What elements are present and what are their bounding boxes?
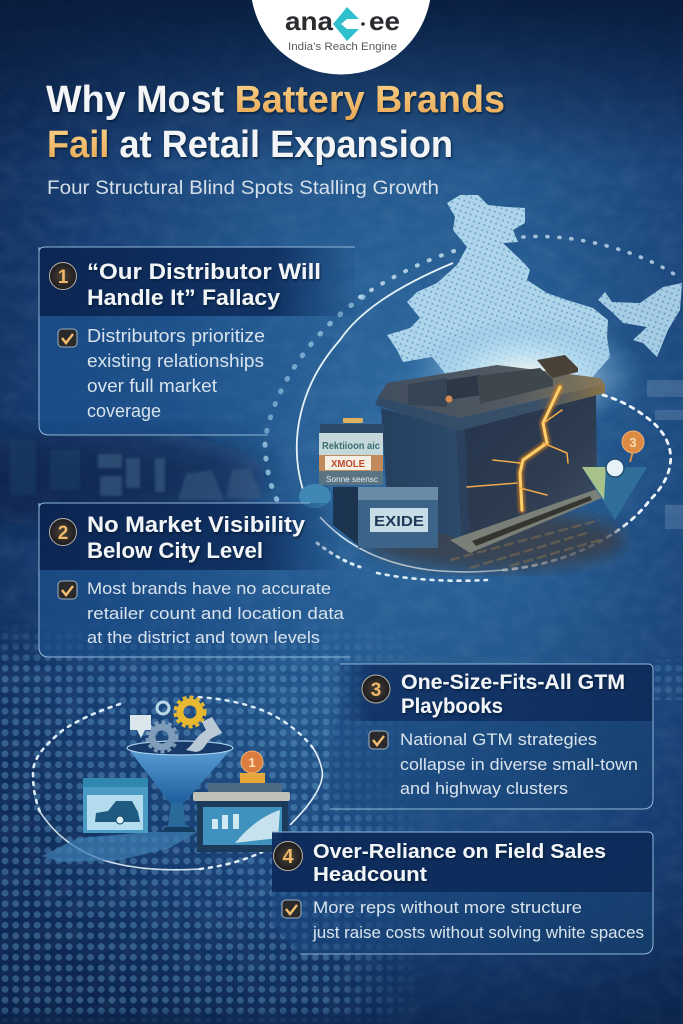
right side faded signage bbox=[647, 380, 683, 529]
panel 3 title bbox=[401, 671, 625, 718]
panel 1 text: over full market bbox=[87, 376, 217, 396]
panel 1 title bbox=[87, 259, 321, 310]
title bbox=[46, 79, 505, 166]
panel 3 number: 3 bbox=[371, 680, 381, 701]
panel 3 check bbox=[369, 731, 388, 749]
panel 4 title: Headcount bbox=[313, 863, 427, 886]
panel 2 title bbox=[87, 512, 306, 563]
panel 1 text bbox=[87, 326, 265, 421]
pin 1 bbox=[241, 751, 263, 773]
title: Fail at Retail Expansion bbox=[47, 124, 453, 166]
battery left face bbox=[381, 408, 462, 540]
battery front face bbox=[456, 390, 597, 545]
panel 4 number: 4 bbox=[282, 846, 294, 868]
panel 1 text: Distributors prioritize bbox=[87, 326, 265, 346]
battery base plate bbox=[450, 488, 604, 553]
panel 2 text: retailer count and location data bbox=[87, 604, 345, 623]
battery with badge bbox=[193, 751, 290, 852]
panel 4 check bbox=[282, 900, 301, 918]
panel 3 body bbox=[330, 721, 653, 809]
logo wordmark left: ana bbox=[285, 6, 334, 36]
battery with badge: 1 bbox=[248, 755, 256, 770]
panel 4 title bbox=[313, 840, 606, 886]
panel 3 title: Playbooks bbox=[401, 695, 503, 718]
panel 3 number bbox=[362, 675, 390, 703]
panel 1 body bbox=[39, 316, 350, 435]
small funnel with pin 3 bbox=[582, 431, 647, 520]
panel 1 number bbox=[50, 262, 76, 290]
small batteries stack bbox=[299, 418, 438, 548]
browser car card bbox=[83, 778, 148, 833]
panel 2 text: at the district and town levels bbox=[87, 628, 320, 647]
logo wordmark right: ee bbox=[369, 6, 400, 36]
panel 1 text: existing relationships bbox=[87, 351, 264, 371]
panel 3 text: and highway clusters bbox=[400, 779, 568, 798]
panel 2 bbox=[39, 503, 350, 657]
panel 4 text bbox=[312, 899, 644, 942]
panel 1 bbox=[39, 247, 355, 435]
subtitle: Four Structural Blind Spots Stalling Growth bbox=[47, 178, 439, 199]
battery lid rim bbox=[375, 384, 605, 431]
logo badge bbox=[250, 0, 432, 74]
panel 4 text: just raise costs without solving white spaces bbox=[312, 924, 644, 942]
dotted orbit ring: battery scene bbox=[265, 236, 680, 581]
logo dot bbox=[361, 22, 365, 26]
bottom orbit ring bbox=[33, 697, 322, 870]
panel 4 bbox=[272, 832, 653, 954]
battery lid top bbox=[378, 365, 605, 418]
icon: gears and tools bbox=[130, 697, 222, 752]
panel 3 text bbox=[400, 730, 638, 798]
panel 2 body bbox=[39, 570, 350, 657]
car bbox=[95, 801, 140, 822]
map shadow bbox=[42, 832, 197, 862]
panel 1 title: “Our Distributor Will bbox=[87, 259, 321, 284]
panel 3 text: National GTM strategies bbox=[400, 730, 597, 749]
title: Why Most Battery Brands bbox=[46, 79, 505, 121]
panel 2 text: Most brands have no accurate bbox=[87, 579, 331, 598]
panel 3 text: collapse in diverse small-town bbox=[400, 755, 638, 774]
back battery with labels: XMOLE bbox=[331, 459, 365, 470]
panel 1 number: 1 bbox=[58, 267, 69, 288]
funnel bbox=[127, 741, 233, 832]
panel 1 header bbox=[39, 247, 355, 316]
main cracked battery bbox=[375, 355, 605, 553]
panel 2 title: Below City Level bbox=[87, 538, 263, 563]
panel 3 bbox=[330, 664, 653, 809]
panel 1 check bbox=[58, 329, 77, 347]
small funnel with pin 3: 3 bbox=[629, 435, 637, 450]
panel 1 title: Handle It” Fallacy bbox=[87, 285, 280, 310]
panel 3 title: One-Size-Fits-All GTM bbox=[401, 671, 625, 694]
panel 4 body bbox=[272, 892, 653, 954]
panel 4 text: More reps without more structure bbox=[313, 899, 582, 917]
panel 4 header bbox=[272, 832, 653, 892]
back battery with labels: Sonne seensc bbox=[326, 475, 378, 484]
left blurred street scene bbox=[10, 440, 262, 500]
pavement under battery bbox=[365, 510, 625, 570]
blue token bbox=[299, 484, 331, 508]
panel 2 header bbox=[39, 503, 339, 570]
panel 4 title: Over-Reliance on Field Sales bbox=[313, 840, 606, 863]
back battery with labels bbox=[319, 418, 384, 485]
bottom funnel scene bbox=[33, 697, 322, 870]
india dotted map bbox=[387, 195, 682, 433]
panel 1 text: coverage bbox=[87, 401, 161, 421]
panel 2 title: No Market Visibility bbox=[87, 512, 306, 537]
logo tagline: India’s Reach Engine bbox=[288, 41, 397, 53]
lightning crack bbox=[467, 387, 568, 510]
panel 2 text bbox=[87, 579, 345, 647]
back battery with labels: Rektiioon aic bbox=[322, 441, 380, 452]
logo mark bbox=[333, 7, 359, 41]
panel 2 number bbox=[50, 518, 76, 546]
panel 3 header bbox=[330, 664, 653, 721]
panel 4 number bbox=[274, 842, 302, 870]
panel 2 number: 2 bbox=[58, 523, 68, 544]
EXIDE battery: EXIDE bbox=[374, 513, 424, 530]
panel 2 check bbox=[58, 581, 77, 599]
